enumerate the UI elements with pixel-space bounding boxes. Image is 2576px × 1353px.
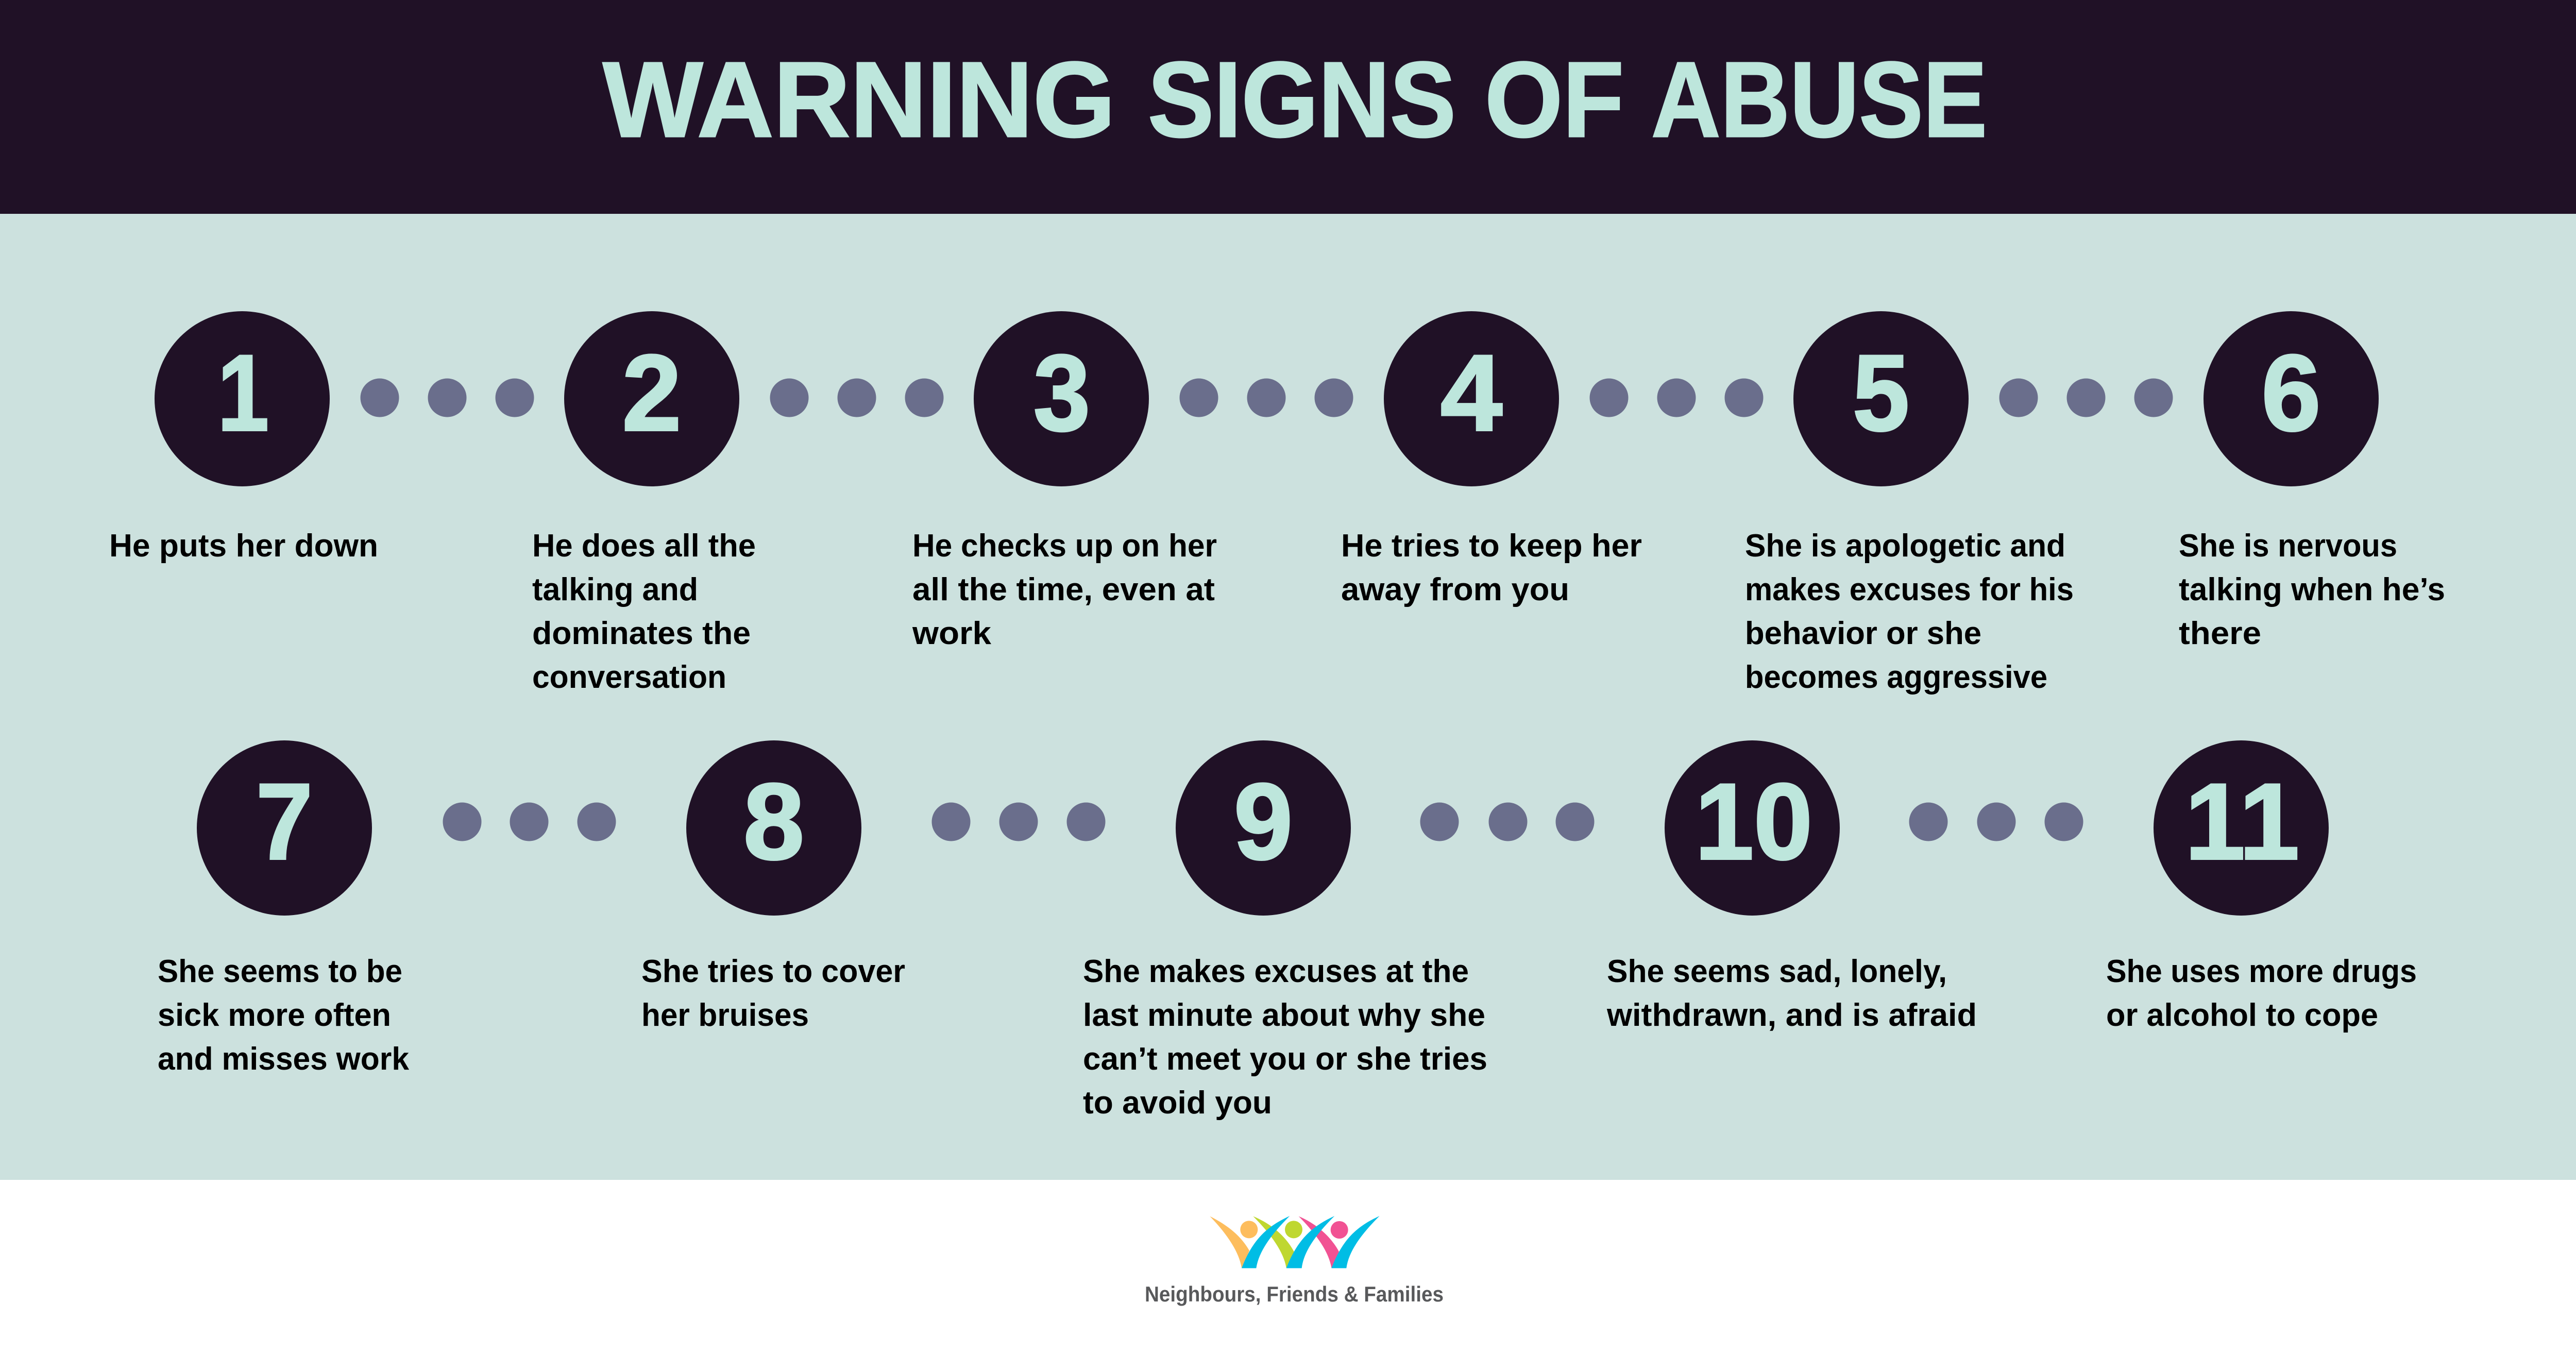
- connector dots 5-6: [1999, 378, 2173, 417]
- connector dots 4-5: [1590, 378, 1763, 417]
- step 1 text: He puts her down: [109, 528, 378, 564]
- step 3 text: [912, 528, 1217, 651]
- step 7 text: She seems to be: [158, 954, 402, 989]
- step 5 text: makes excuses for his: [1745, 572, 2074, 607]
- step 5 text: becomes aggressive: [1745, 659, 2047, 695]
- step 5 text: [1745, 528, 2074, 695]
- logo wordmark: Neighbours, Friends & Families: [1145, 1282, 1444, 1306]
- step 5 badge: 5: [1853, 332, 1909, 453]
- step 3 badge: 3: [1033, 332, 1090, 453]
- step 5 badge: [1793, 311, 1969, 486]
- step 9 text: can’t meet you or she tries: [1083, 1041, 1487, 1077]
- title: [603, 40, 1987, 160]
- step 5 text: She is apologetic and: [1745, 528, 2065, 564]
- connector dots 8-9: [931, 803, 1106, 841]
- step 6 text: there: [2179, 616, 2261, 651]
- step 10 text: withdrawn, and is afraid: [1606, 997, 1977, 1033]
- step 10 text: [1606, 954, 1977, 1033]
- step 7 badge: [197, 740, 372, 916]
- step 9 text: She makes excuses at the: [1083, 954, 1469, 989]
- logo: Neighbours, Friends & Families: [1145, 1216, 1444, 1306]
- header band with title: [0, 0, 2576, 214]
- title: OF: [1485, 40, 1624, 160]
- connector dots 9-10: [1420, 803, 1594, 841]
- step 6 text: [2179, 528, 2445, 651]
- step 7 text: [158, 954, 409, 1077]
- step 4 text: away from you: [1341, 572, 1569, 607]
- connector dots 2-3: [770, 378, 944, 417]
- step 1 badge: 1: [217, 332, 269, 453]
- step 4 badge: [1384, 311, 1559, 486]
- step 7 badge: 7: [256, 761, 313, 882]
- step 7 text: sick more often: [158, 997, 391, 1033]
- connector dots 1-2: [361, 378, 534, 417]
- step 3 text: all the time, even at: [912, 572, 1215, 607]
- step 11 text: She uses more drugs: [2106, 954, 2417, 989]
- step 9 text: [1083, 954, 1487, 1121]
- step 10 badge: 10: [1695, 761, 1812, 882]
- panel: warning signs: [0, 214, 2576, 1180]
- step 8 badge: [686, 740, 861, 916]
- step 3 text: work: [912, 616, 992, 651]
- step 10 badge: [1665, 740, 1840, 916]
- step 6 badge: 6: [2262, 332, 2320, 453]
- step 9 badge: [1176, 740, 1351, 916]
- step 6 badge: [2204, 311, 2379, 486]
- connector dots 3-4: [1180, 378, 1353, 417]
- step 3 badge: [974, 311, 1149, 486]
- step 11 text: [2106, 954, 2417, 1033]
- connector dots 10-11: [1909, 803, 2083, 841]
- icon: three raised-arm figures: [1210, 1216, 1380, 1268]
- step 2 badge: [564, 311, 739, 486]
- step 2 text: He does all the: [532, 528, 756, 564]
- step 9 text: last minute about why she: [1083, 997, 1485, 1033]
- step 6 text: She is nervous: [2179, 528, 2397, 564]
- step 4 badge: 4: [1440, 332, 1502, 453]
- step 1 badge: [155, 311, 330, 486]
- step 4 text: [1341, 528, 1642, 607]
- step 2 text: [532, 528, 756, 695]
- step 11 badge: 11: [2185, 761, 2299, 882]
- step 2 text: conversation: [532, 659, 726, 695]
- step 8 text: She tries to cover: [641, 954, 905, 989]
- step 7 text: and misses work: [158, 1041, 409, 1077]
- step 9 text: to avoid you: [1083, 1085, 1272, 1121]
- step 11 text: or alcohol to cope: [2106, 997, 2378, 1033]
- title: WARNING: [603, 40, 1115, 160]
- step 4 text: He tries to keep her: [1341, 528, 1642, 564]
- step 8 badge: 8: [743, 761, 804, 882]
- step 8 text: [641, 954, 905, 1033]
- title: ABUSE: [1651, 40, 1987, 160]
- step 8 text: her bruises: [641, 997, 809, 1033]
- step 5 text: behavior or she: [1745, 616, 1981, 651]
- step 6 text: talking when he’s: [2179, 572, 2445, 607]
- step 9 badge: 9: [1234, 761, 1293, 882]
- step 3 text: He checks up on her: [912, 528, 1217, 564]
- title: SIGNS: [1148, 40, 1456, 160]
- step 10 text: She seems sad, lonely,: [1607, 954, 1947, 989]
- step 2 text: dominates the: [532, 616, 751, 651]
- connector dots 7-8: [443, 803, 616, 841]
- step 2 text: talking and: [532, 572, 698, 607]
- step 11 badge: [2154, 740, 2329, 916]
- step 2 badge: 2: [622, 332, 681, 453]
